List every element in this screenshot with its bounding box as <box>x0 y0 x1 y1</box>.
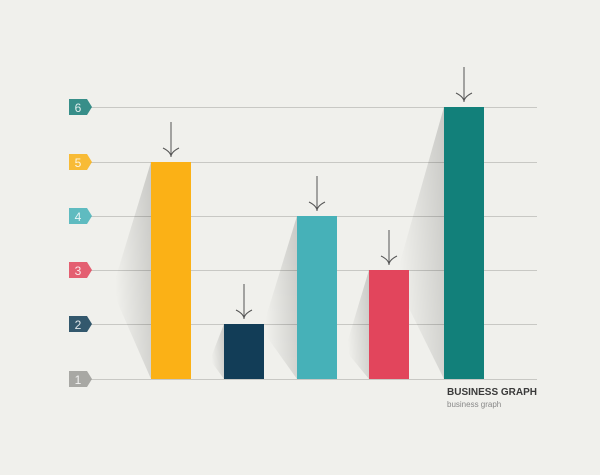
axis tags: 1 <box>75 373 82 387</box>
subtitle: business graph <box>447 400 501 409</box>
arrows <box>163 67 472 319</box>
bars <box>151 162 191 379</box>
axis tags: 3 <box>75 264 82 278</box>
axis tags: 6 <box>75 101 82 115</box>
shadows <box>112 107 444 379</box>
title: BUSINESS GRAPH <box>447 387 537 398</box>
axis tags: 2 <box>75 318 82 332</box>
axis tags <box>69 99 92 387</box>
axis tags: 5 <box>75 156 82 170</box>
axis tags: 4 <box>75 210 82 224</box>
